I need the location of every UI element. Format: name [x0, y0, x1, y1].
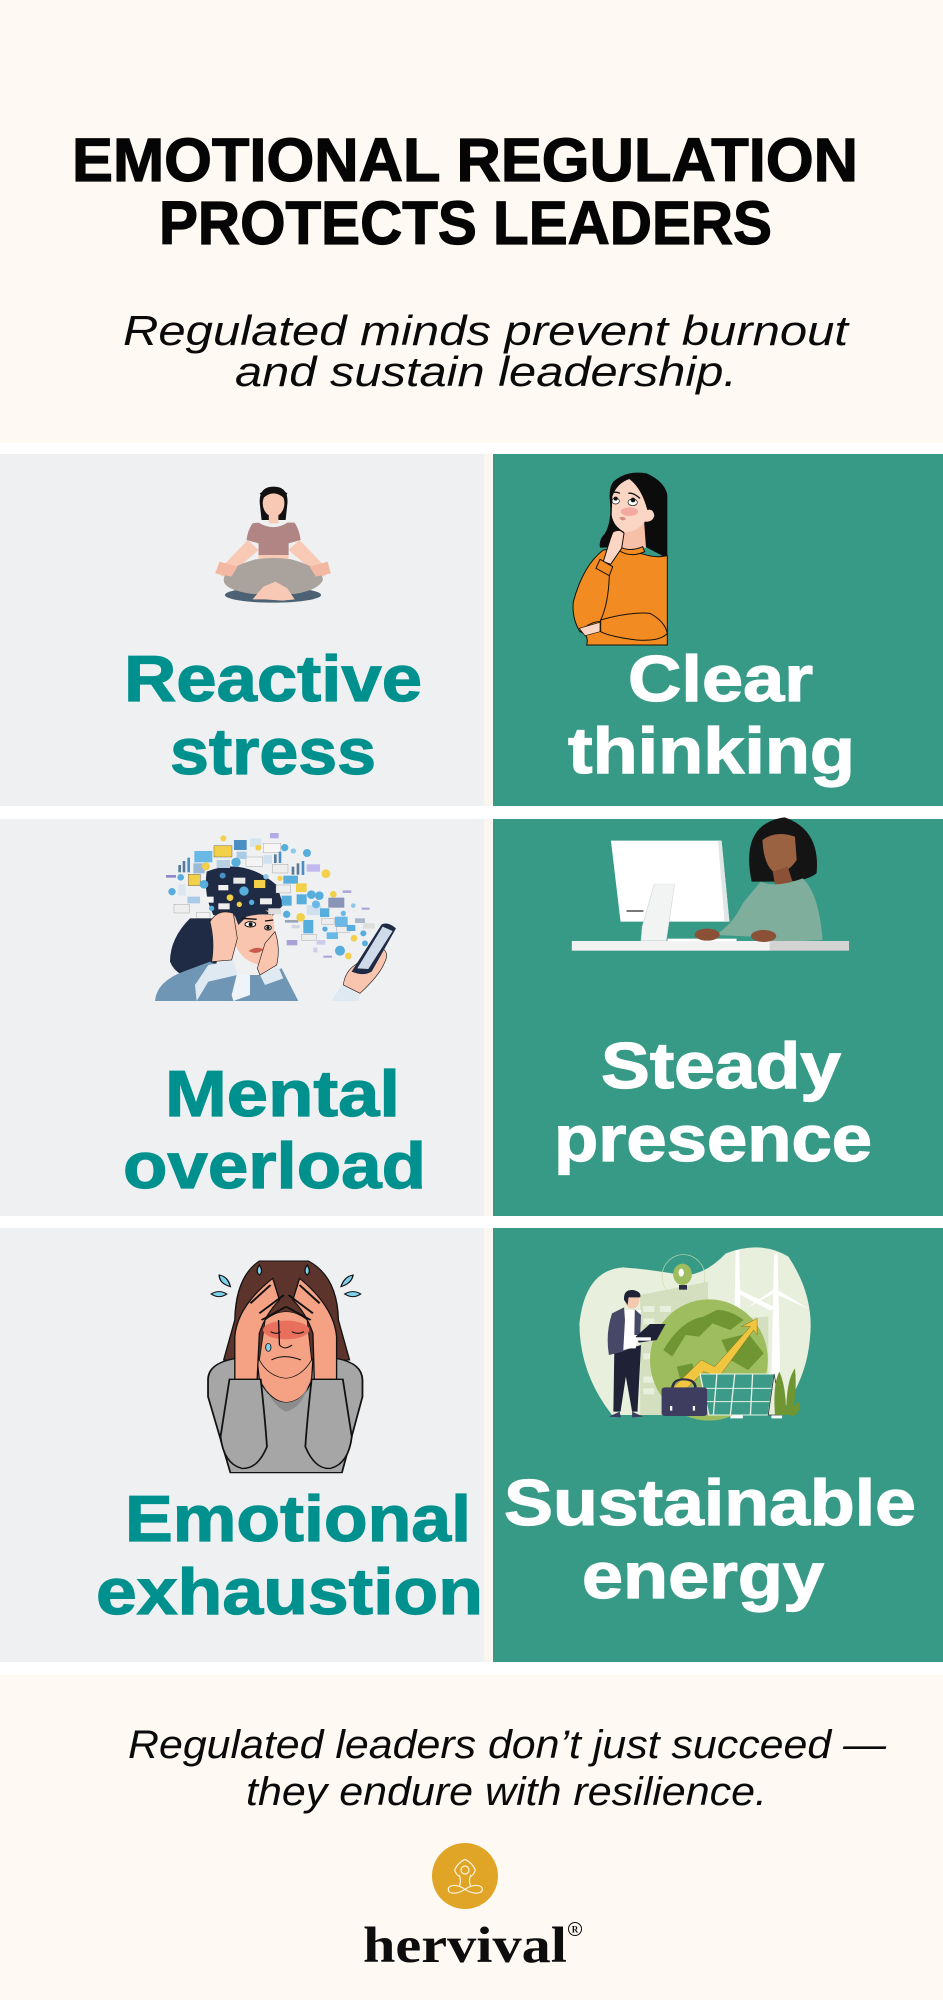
logo wordmark: hervival	[363, 1918, 567, 1974]
label: emotional exhaustion: exhaustion	[96, 1555, 483, 1628]
closing statement: Regulated leaders don’t just succeed —	[128, 1723, 887, 1767]
label: mental overload: overload	[123, 1129, 426, 1202]
icon: overloaded woman with phone	[155, 833, 396, 1001]
label: reactive stress	[124, 642, 422, 788]
subtitle	[123, 307, 851, 395]
label: steady presence: Steady	[601, 1029, 841, 1102]
panel: sustainable energy	[493, 1228, 943, 1662]
icon: thinking woman	[573, 473, 667, 645]
icon: businessman with globe	[579, 1247, 811, 1421]
icon: woman at computer	[572, 817, 849, 951]
panel: mental overload	[0, 819, 493, 1216]
label: emotional exhaustion: Emotional	[125, 1482, 471, 1555]
label: emotional exhaustion	[96, 1482, 483, 1628]
label: clear thinking	[568, 642, 855, 787]
label: sustainable energy: Sustainable	[504, 1466, 916, 1539]
closing statement	[128, 1723, 887, 1814]
label: steady presence	[554, 1029, 872, 1175]
panel: footer	[0, 1675, 943, 2000]
panel: emotional exhaustion	[0, 1228, 493, 1662]
label: reactive stress: stress	[170, 715, 376, 788]
label: mental overload	[123, 1057, 426, 1202]
label: sustainable energy: energy	[582, 1539, 824, 1612]
title	[72, 126, 858, 257]
logo wordmark: R	[572, 1924, 579, 1934]
label: mental overload: Mental	[165, 1057, 400, 1130]
panel: steady presence	[493, 817, 943, 1216]
label: sustainable energy	[504, 1466, 916, 1612]
title: PROTECTS LEADERS	[159, 189, 772, 257]
label: steady presence: presence	[554, 1102, 872, 1175]
subtitle: and sustain leadership.	[235, 348, 737, 395]
panel: clear thinking	[493, 454, 943, 806]
title: EMOTIONAL REGULATION	[72, 126, 858, 194]
logo icon	[432, 1843, 498, 1909]
label: clear thinking: Clear	[628, 642, 813, 715]
icon: meditating woman	[215, 487, 331, 603]
label: reactive stress: Reactive	[124, 642, 422, 715]
icon: exhausted woman	[208, 1261, 362, 1473]
label: clear thinking: thinking	[568, 714, 855, 787]
subtitle: Regulated minds prevent burnout	[123, 307, 851, 354]
closing statement: they endure with resilience.	[246, 1770, 767, 1814]
panel: reactive stress	[0, 454, 493, 806]
panel: header	[0, 0, 943, 443]
icon cloud	[166, 833, 375, 959]
